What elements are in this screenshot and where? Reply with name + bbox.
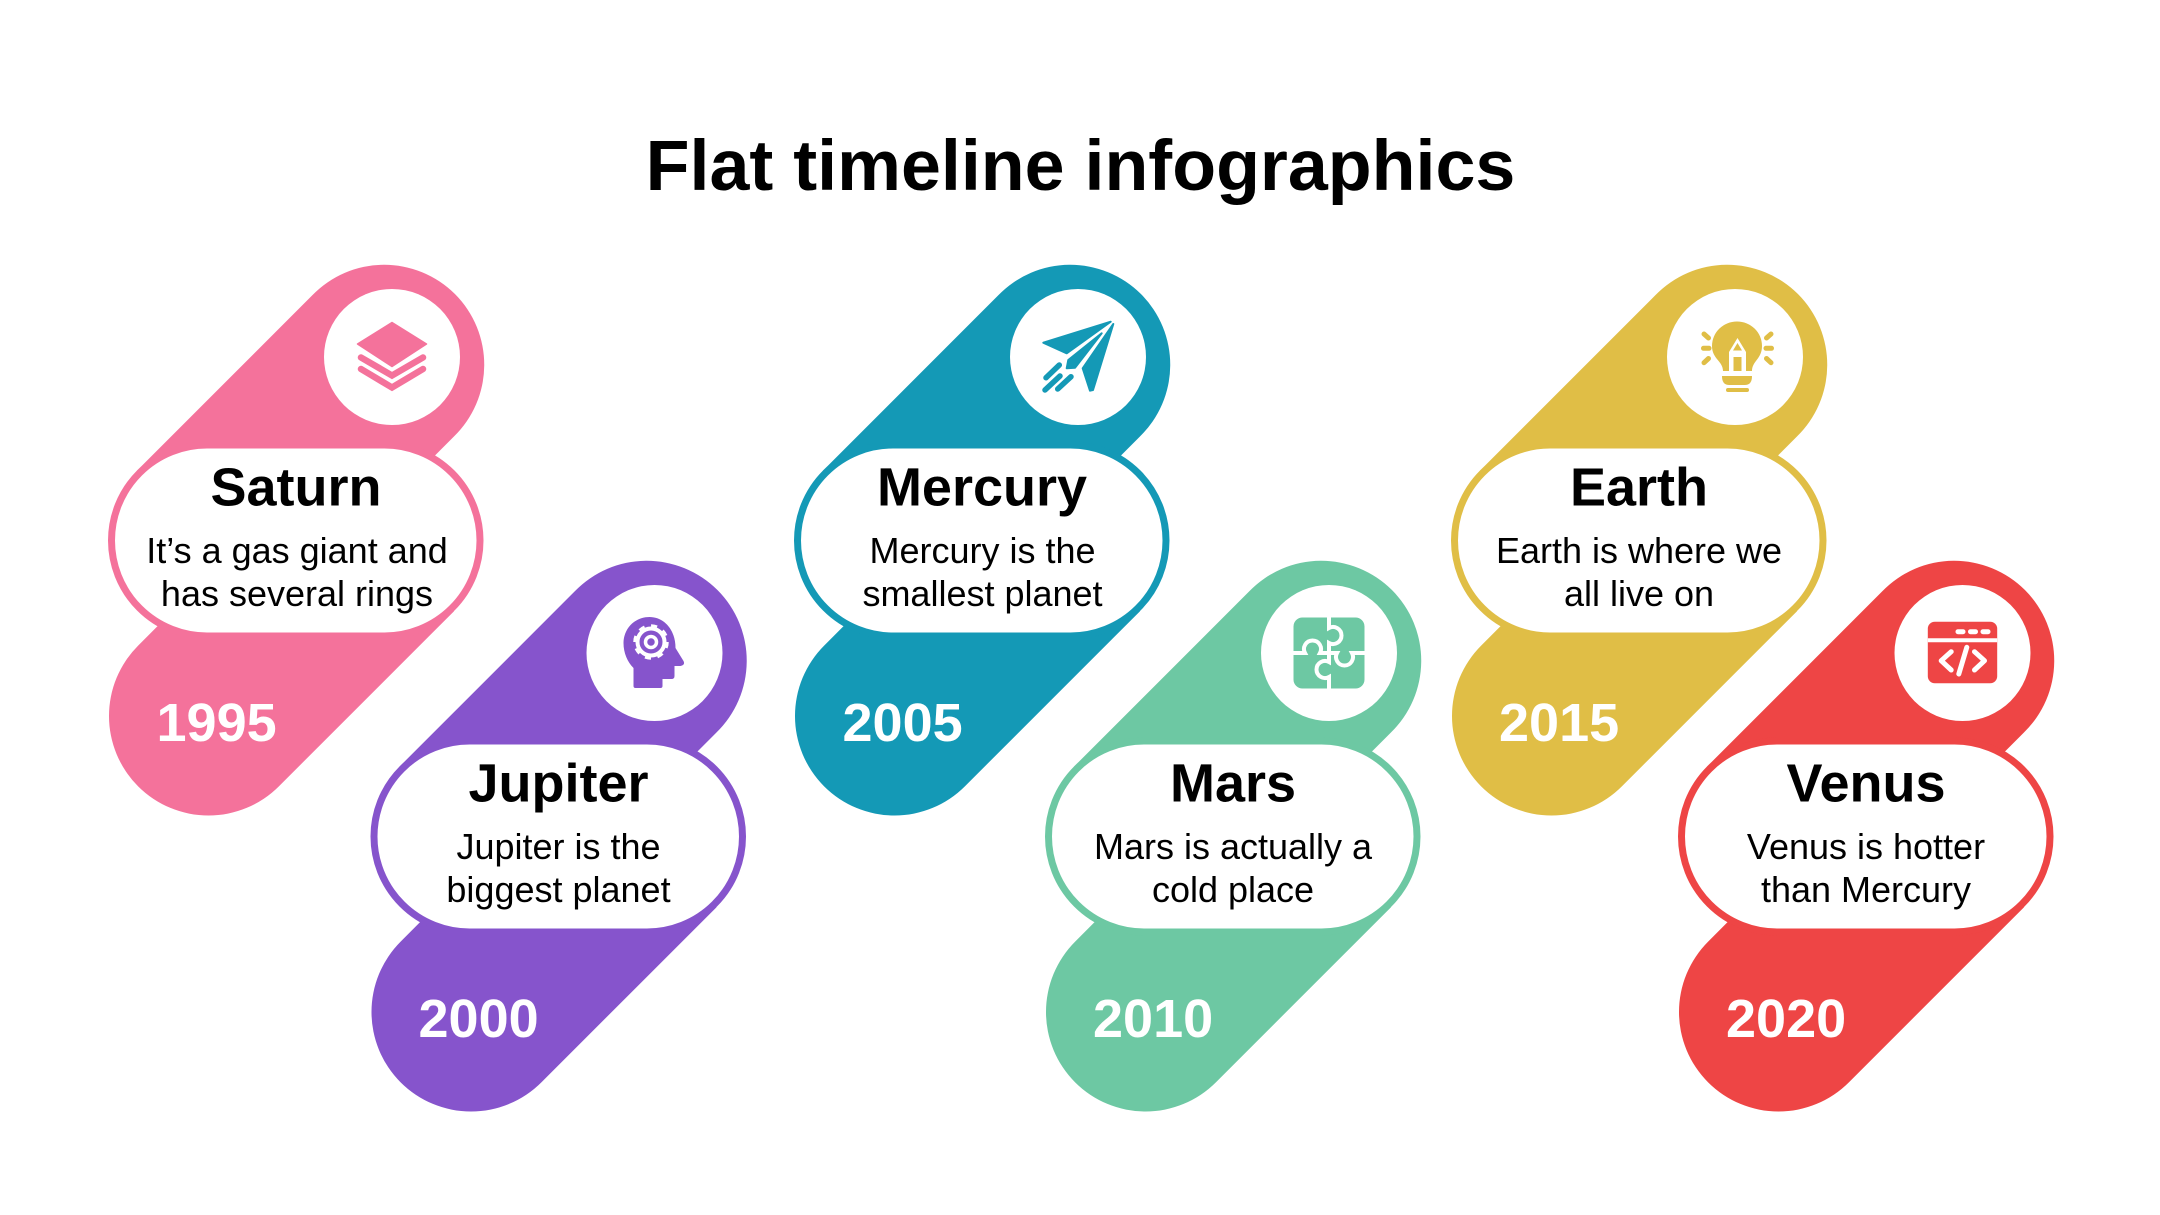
label pill: Mars bbox=[1048, 741, 1417, 932]
label pill: Jupiter: Jupiter is the bbox=[456, 826, 661, 867]
label pill: Jupiter: Jupiter bbox=[468, 754, 649, 814]
label pill: Earth: Earth bbox=[1570, 458, 1708, 518]
label pill: Venus: Venus bbox=[1786, 754, 1946, 814]
label pill: Jupiter bbox=[374, 741, 742, 932]
year: 2005: 2005 bbox=[842, 693, 963, 753]
label pill: Mercury: Mercury bbox=[877, 458, 1087, 518]
label pill: Earth: all live on bbox=[1564, 573, 1714, 614]
panel: Venus 2020 bbox=[1679, 561, 2054, 1112]
label pill: Saturn: Saturn bbox=[210, 458, 382, 518]
year: 2015: 2015 bbox=[1499, 693, 1619, 753]
title: Flat timeline infographics bbox=[646, 126, 1515, 206]
shape: Jupiter ribbon bbox=[371, 561, 747, 1112]
icon: lightbulb with pencil bbox=[1667, 289, 1803, 425]
icon: paper plane bbox=[1010, 289, 1146, 425]
year: 2000: 2000 bbox=[418, 989, 539, 1049]
label pill: Mercury: Mercury is the bbox=[869, 530, 1096, 571]
label pill: Venus: Venus is hotter bbox=[1747, 826, 1985, 867]
shape: Earth ribbon bbox=[1452, 265, 1827, 816]
label pill: Jupiter: biggest planet bbox=[446, 869, 671, 910]
shape: Venus ribbon bbox=[1679, 561, 2054, 1112]
year: 1995: 1995 bbox=[156, 693, 277, 753]
panel: Earth 2015 bbox=[1452, 265, 1827, 816]
panel: Mercury 2005 bbox=[795, 265, 1170, 816]
icon: layers bbox=[324, 289, 460, 425]
label pill: Mars: Mars is actually a bbox=[1094, 826, 1373, 867]
year: 2010: 2010 bbox=[1093, 989, 1213, 1049]
shape: Mars ribbon bbox=[1046, 561, 1421, 1112]
icon: code window bbox=[1894, 585, 2030, 721]
panel: Mars 2010 bbox=[1046, 561, 1421, 1112]
shape: Saturn ribbon bbox=[109, 265, 484, 816]
label pill: Venus: than Mercury bbox=[1761, 869, 1971, 910]
label pill: Earth: Earth is where we bbox=[1496, 530, 1782, 571]
label pill: Mercury bbox=[798, 445, 1166, 636]
icon: puzzle bbox=[1261, 585, 1397, 721]
label pill: Saturn: has several rings bbox=[161, 573, 433, 614]
icon: head with gear bbox=[586, 585, 722, 721]
label pill: Earth bbox=[1454, 445, 1823, 636]
label pill: Saturn: It’s a gas giant and bbox=[146, 530, 448, 571]
panel: Jupiter 2000 bbox=[371, 561, 747, 1112]
label pill: Mars: Mars bbox=[1170, 754, 1296, 814]
shape: Mercury ribbon bbox=[795, 265, 1170, 816]
label pill: Venus bbox=[1682, 741, 2050, 932]
year: 2020: 2020 bbox=[1726, 989, 1846, 1049]
label pill: Mars: cold place bbox=[1152, 869, 1314, 910]
panel: Saturn 1995 bbox=[109, 265, 484, 816]
label pill: Saturn bbox=[112, 445, 480, 636]
label pill: Mercury: smallest planet bbox=[862, 573, 1103, 614]
